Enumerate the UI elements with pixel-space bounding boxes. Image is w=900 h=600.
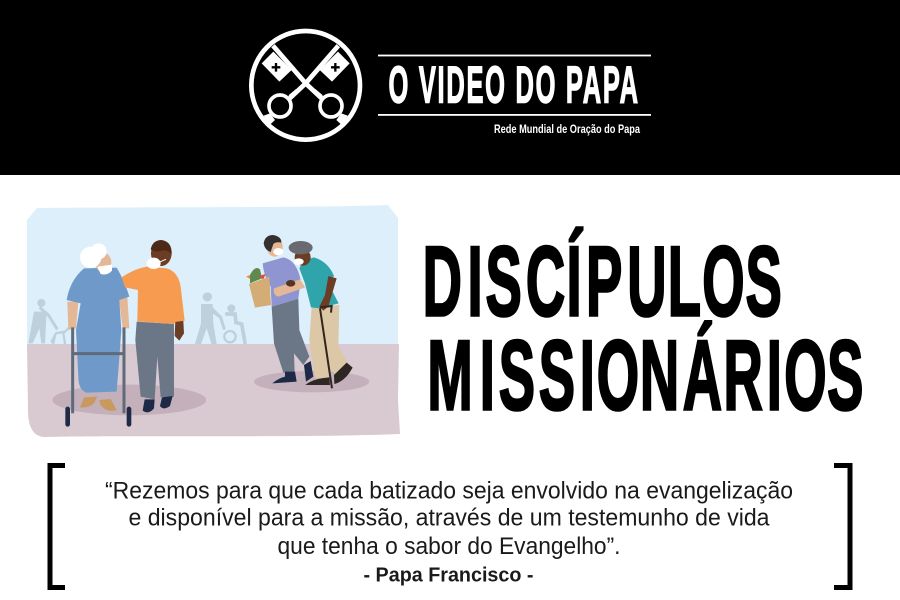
figure: young man with bag and elderly man with cane bbox=[246, 235, 369, 392]
logo tagline: Rede Mundial de Oração do Papa bbox=[494, 124, 640, 136]
walker bbox=[73, 327, 124, 413]
prayer quote: “Rezemos para que cada batizado seja envolvido na evangelização bbox=[105, 477, 793, 504]
young man shirt bbox=[263, 257, 301, 307]
grocery bag bbox=[246, 268, 271, 308]
man sweater bbox=[122, 267, 185, 324]
woman dress bbox=[67, 268, 129, 393]
woman head bbox=[80, 243, 112, 275]
icon: crossed keys logo bbox=[251, 31, 360, 140]
elderly man trousers bbox=[309, 305, 348, 378]
panel background: sky bbox=[27, 205, 398, 345]
main title bbox=[423, 226, 863, 431]
logo rule top bbox=[378, 55, 651, 56]
right bracket bbox=[834, 466, 850, 588]
title line 1: DISCÍPULOS bbox=[423, 226, 782, 337]
man head bbox=[147, 240, 172, 269]
logo wordmark: O VIDEO DO PAPA bbox=[389, 55, 640, 114]
elderly man shirt bbox=[299, 257, 339, 308]
logo rule bottom bbox=[378, 114, 651, 116]
young man trousers bbox=[272, 299, 309, 373]
man shoes bbox=[143, 396, 173, 412]
illustration panel bbox=[27, 205, 400, 437]
left bracket bbox=[50, 466, 65, 588]
elderly man shoes bbox=[305, 363, 353, 385]
title line 2: MISSIONÁRIOS bbox=[427, 320, 863, 431]
man hand bbox=[175, 321, 184, 341]
panel background: ground bbox=[27, 344, 400, 437]
elderly man arm bbox=[319, 276, 337, 311]
young man shoes bbox=[272, 361, 313, 383]
cane bbox=[320, 306, 332, 388]
arms linked bbox=[274, 279, 305, 297]
prayer quote bbox=[105, 477, 793, 587]
man pants bbox=[135, 322, 174, 399]
header band bbox=[0, 0, 900, 175]
prayer quote: e disponível para a missão, através de um testemunho de vida bbox=[128, 505, 770, 532]
elderly man head bbox=[289, 241, 313, 266]
young man head bbox=[264, 235, 283, 257]
prayer quote: que tenha o sabor do Evangelho”. bbox=[278, 533, 620, 560]
woman arms bbox=[67, 297, 129, 330]
figure: woman with walker and helper bbox=[52, 240, 206, 427]
shoes woman bbox=[80, 397, 117, 411]
quote attribution: - Papa Francisco - bbox=[364, 565, 534, 587]
background silhouettes bbox=[28, 292, 245, 344]
